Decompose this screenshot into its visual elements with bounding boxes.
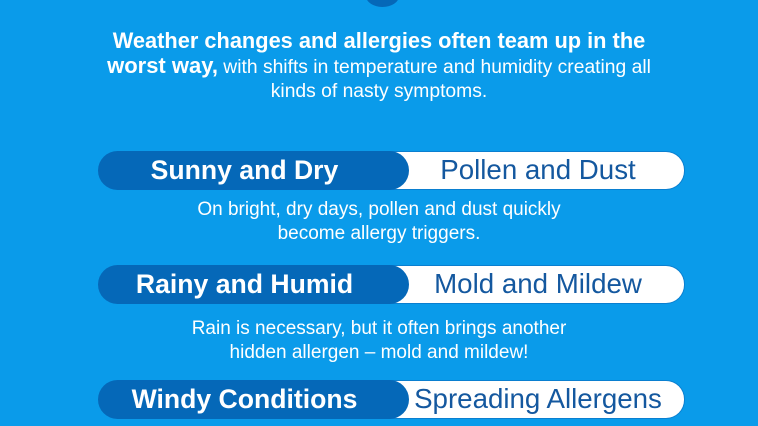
- label: Spreading Allergens: [388, 380, 685, 419]
- label: Pollen and Dust: Pollen and Dust: [440, 154, 636, 185]
- heading: Sunny and Dry: [98, 151, 409, 190]
- label: Spreading Allergens: Spreading Allergens: [414, 383, 662, 414]
- heading: Windy Conditions: [98, 380, 409, 419]
- description: sunny and dry: become allergy triggers.: [278, 223, 480, 244]
- intro text: kinds of nasty symptoms.: [271, 81, 487, 102]
- icon: partial dark blue circle at top: [366, 0, 399, 7]
- intro text: worst way, with shifts in temperature and humidity creating all: [107, 53, 651, 78]
- heading: Sunny and Dry: Sunny and Dry: [151, 155, 338, 185]
- label: Mold and Mildew: [388, 265, 685, 304]
- heading: Windy Conditions: Windy Conditions: [132, 384, 357, 414]
- intro text: [107, 28, 651, 102]
- description: rainy and humid: [192, 318, 566, 363]
- description: rainy and humid: hidden allergen – mold and mildew!: [230, 342, 528, 363]
- row: Rainy and Humid: [98, 265, 685, 304]
- heading: Rainy and Humid: [98, 265, 409, 304]
- description: sunny and dry: [197, 199, 561, 244]
- label: Pollen and Dust: [388, 151, 685, 190]
- label: Mold and Mildew: Mold and Mildew: [434, 268, 642, 299]
- row: Windy Conditions: [98, 380, 685, 419]
- description: rainy and humid: Rain is necessary, but it often brings another: [192, 318, 566, 339]
- description: sunny and dry: On bright, dry days, pollen and dust quickly: [197, 199, 561, 220]
- intro text: Weather changes and allergies often team up in the: [113, 28, 645, 53]
- row: Sunny and Dry: [98, 151, 685, 190]
- heading: Rainy and Humid: Rainy and Humid: [136, 269, 353, 299]
